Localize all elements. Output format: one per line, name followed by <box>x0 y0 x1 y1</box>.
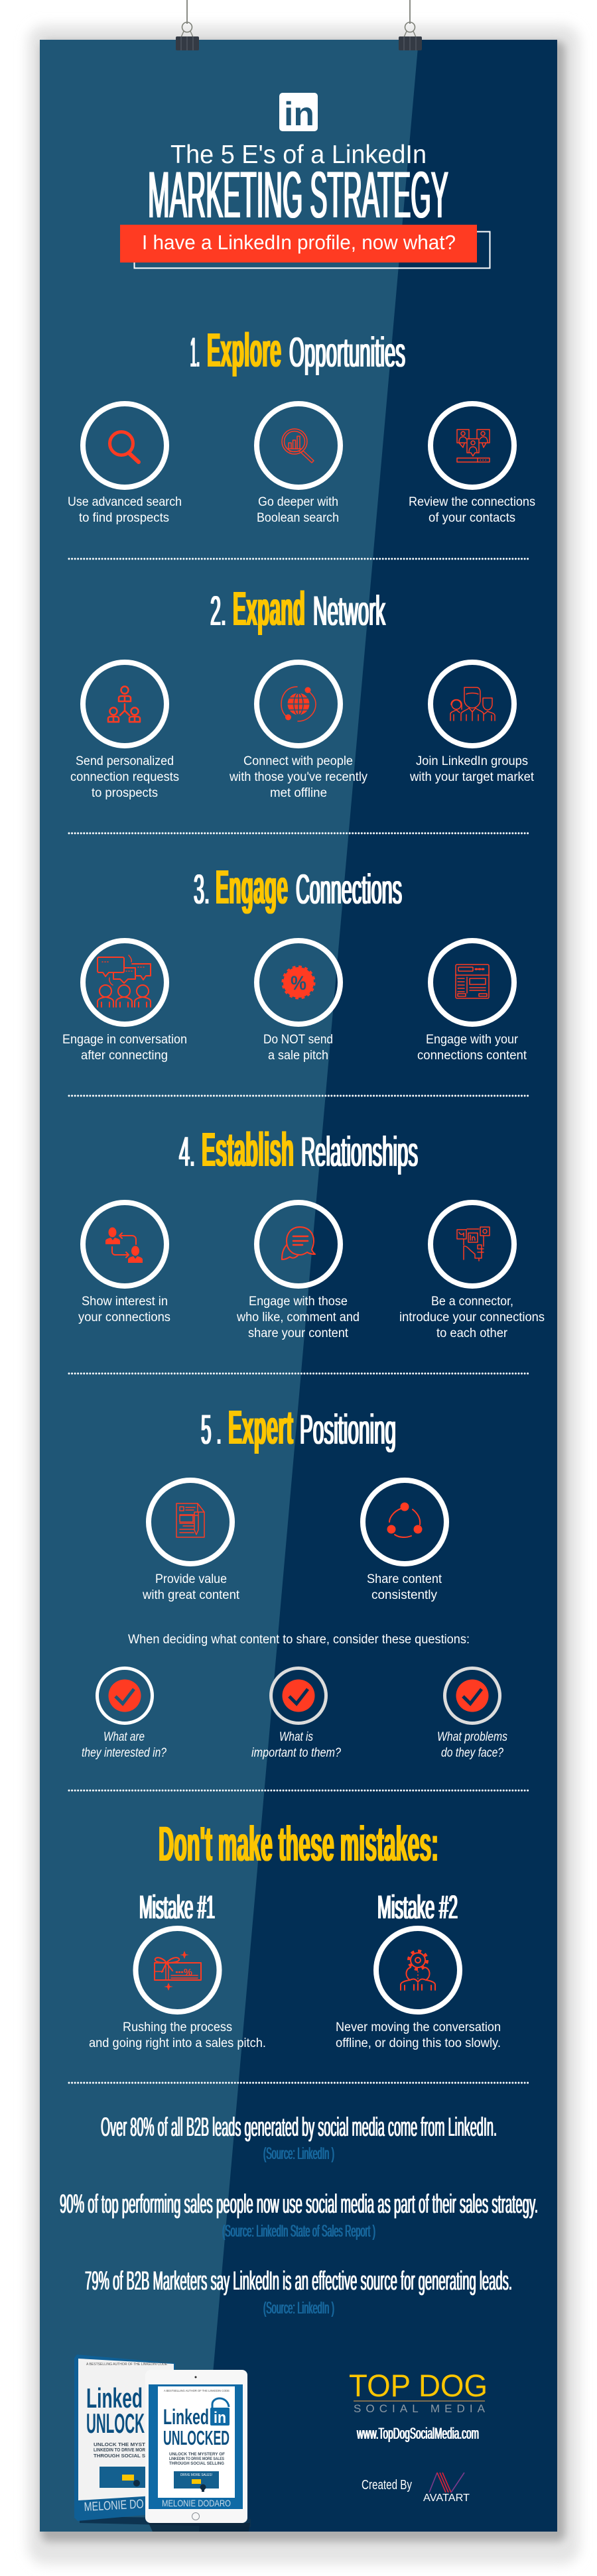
caption: after connecting <box>81 1049 168 1063</box>
question 2 <box>251 1668 341 1760</box>
caption: Go deeper with <box>258 495 338 509</box>
question 1 <box>82 1668 166 1760</box>
caption <box>142 1572 240 1602</box>
logo: Top Dog Social Media: TOP DOG <box>349 2368 488 2403</box>
caption: Be a connector, <box>431 1295 513 1309</box>
caption: Do NOT send <box>263 1033 333 1047</box>
caption: Show interest in <box>82 1295 168 1309</box>
caption: introduce your connections <box>399 1311 545 1324</box>
caption: your connections <box>78 1311 170 1324</box>
tablet: THROUGH SOCIAL SELLING <box>169 2462 224 2466</box>
caption: met offline <box>270 786 327 800</box>
item: engage in conversation <box>62 941 187 1063</box>
icon: gear over people <box>376 1928 460 2012</box>
credit: created by Avatart: Created By <box>362 2478 412 2492</box>
stat 3: (Source: LinkedIn ) <box>263 2299 334 2317</box>
icon: magnifying glass <box>83 404 166 487</box>
caption: Connect with people <box>243 754 353 768</box>
section 5: Expert Positioning: Positioning <box>300 1407 396 1453</box>
credit: created by Avatart <box>362 2473 470 2504</box>
logo: Top Dog Social Media: SOCIAL MEDIA <box>354 2402 486 2415</box>
section 3: Engage Connections: Connections <box>296 866 402 913</box>
section 1: Explore Opportunities <box>68 324 535 525</box>
caption: Review the connections <box>409 495 535 509</box>
book: Linked <box>86 2382 143 2414</box>
caption <box>263 1033 333 1063</box>
icon: gift voucher <box>135 1928 219 2012</box>
section 1: Explore Opportunities: Opportunities <box>289 329 405 376</box>
stat 2: (Source: LinkedIn State of Sales Report ) <box>222 2222 375 2241</box>
label: Mistake #2 <box>377 1889 458 1926</box>
stat 3 <box>85 2266 512 2317</box>
caption <box>409 495 535 525</box>
caption <box>409 754 535 784</box>
icon: network of people <box>83 662 166 746</box>
caption: with your target market <box>409 770 535 784</box>
caption <box>367 1572 442 1602</box>
icon: discount badge <box>257 941 340 1024</box>
caption <box>78 1295 170 1324</box>
section 5: Expert Positioning <box>82 1401 507 1760</box>
section 4: Establish Relationships <box>78 1124 545 1340</box>
caption: important to them? <box>251 1746 341 1760</box>
section 4: Establish Relationships: Relationships <box>301 1129 418 1175</box>
tablet: in <box>214 2409 226 2427</box>
caption <box>417 1033 527 1063</box>
caption <box>236 1295 360 1340</box>
tablet: Linked <box>163 2405 209 2429</box>
caption: of your contacts <box>429 511 515 525</box>
caption <box>251 1730 341 1760</box>
item: connect offline <box>229 662 367 800</box>
icon: two people with arrows <box>83 1202 166 1286</box>
caption <box>257 495 339 525</box>
item: review connections <box>409 404 535 525</box>
icon: check mark <box>271 1668 326 1724</box>
caption: with those you've recently <box>229 770 367 784</box>
caption: share your content <box>248 1326 349 1340</box>
website: www.TopDogSocialMedia.com <box>356 2425 479 2443</box>
heading: Expert <box>228 1401 293 1454</box>
caption <box>399 1295 545 1340</box>
caption: Engage with those <box>249 1295 348 1309</box>
book: UNLOCK THE MYST <box>94 2443 146 2447</box>
heading: Engage <box>216 861 288 914</box>
caption <box>82 1730 166 1760</box>
item: LinkedIn groups <box>409 662 535 784</box>
caption <box>70 754 179 800</box>
caption <box>68 495 182 525</box>
caption: and going right into a sales pitch. <box>89 2036 266 2050</box>
caption: who like, comment and <box>236 1311 360 1324</box>
mistake 1 <box>89 1889 266 2050</box>
section: mistakes <box>89 1816 501 2050</box>
mistake 1: Mistake #1 <box>139 1889 215 1926</box>
caption: What are <box>103 1730 145 1744</box>
section 2: Expand Network: Network <box>313 588 385 634</box>
heading: 2. <box>210 588 226 634</box>
caption: Rushing the process <box>123 2020 232 2034</box>
item: personalized requests <box>70 662 179 800</box>
stat 1 <box>101 2113 497 2163</box>
icon: contact cards <box>431 404 514 487</box>
item: boolean search <box>257 404 340 525</box>
tablet: UNLOCK THE MYSTERY OF <box>169 2453 225 2457</box>
caption: Share content <box>367 1572 442 1586</box>
caption: Engage in conversation <box>62 1033 187 1047</box>
icon: group of three <box>431 662 514 746</box>
heading: Expand <box>233 583 305 636</box>
heading: 3. <box>194 866 210 913</box>
caption <box>336 2020 501 2050</box>
heading: 4. <box>179 1129 195 1175</box>
caption: connections content <box>417 1049 527 1063</box>
credit: created by Avatart: AVATART <box>423 2492 470 2504</box>
caption: Join LinkedIn groups <box>416 754 528 768</box>
tablet: DRIVE MORE SALES! <box>180 2473 212 2477</box>
icon: document with pen <box>149 1480 232 1564</box>
icon: discount badge: % <box>291 972 306 994</box>
icon: check mark <box>97 1668 153 1724</box>
caption: to find prospects <box>79 511 169 525</box>
heading: 1. <box>190 329 200 376</box>
caption: Engage with your <box>426 1033 519 1047</box>
tablet: A BESTSELLING AUTHOR OF THE LINKEDIN CODE <box>164 2389 230 2392</box>
caption: Provide value <box>155 1572 227 1586</box>
tablet: UNLOCKED <box>163 2426 230 2449</box>
caption: Use advanced search <box>68 495 182 509</box>
stat 2 <box>60 2190 538 2241</box>
book: THROUGH SOCIAL S <box>94 2454 145 2459</box>
icon: magnifier with bars <box>257 404 340 487</box>
tablet: MELONIE DODARO <box>162 2498 231 2508</box>
heading: 5 . <box>201 1407 222 1453</box>
book: UNLOCK <box>86 2408 145 2439</box>
caption: What is <box>279 1730 313 1744</box>
book: LINKEDIN TO DRIVE MOR <box>94 2448 145 2453</box>
caption <box>89 2020 266 2050</box>
subtitle banner: I have a LinkedIn profile, now what? <box>142 231 456 254</box>
icon: share cycle <box>363 1480 446 1564</box>
caption: to prospects <box>92 786 158 800</box>
book: MELONIE DO <box>84 2497 144 2514</box>
section 3: Engage Connections <box>62 861 527 1063</box>
item: be a connector <box>399 1202 545 1340</box>
questions intro: When deciding what content to share, consider these questions: <box>128 1633 470 1647</box>
item: show interest <box>78 1202 170 1324</box>
icon: people talking <box>83 941 166 1024</box>
item: engage with likers <box>236 1202 360 1340</box>
icon: LinkedIn logo: in <box>284 95 314 133</box>
tablet <box>145 2370 250 2532</box>
mistake 2 <box>336 1889 501 2050</box>
icon: speech bubbles <box>257 1202 340 1286</box>
item: advanced search <box>68 404 182 525</box>
icon: check mark <box>444 1668 500 1724</box>
caption: offline, or doing this too slowly. <box>336 2036 501 2050</box>
caption: a sale pitch <box>268 1049 328 1063</box>
caption: Boolean search <box>257 511 339 525</box>
binder clip right <box>399 0 422 50</box>
item: share content <box>363 1480 446 1602</box>
stat 1: (Source: LinkedIn ) <box>263 2144 334 2163</box>
title line 1: The 5 E's of a LinkedIn <box>170 141 427 169</box>
item: no sale pitch <box>257 941 340 1063</box>
section 2: Expand Network <box>70 583 535 800</box>
item: engage with content <box>417 941 527 1063</box>
question 3 <box>437 1668 507 1760</box>
heading: Explore <box>207 324 281 377</box>
caption: they interested in? <box>82 1746 166 1760</box>
book: A BESTSELLING AUTHOR OF THE LINKEDIN CODE <box>86 2363 168 2367</box>
header <box>120 93 490 268</box>
caption: with great content <box>142 1588 240 1602</box>
caption: do they face? <box>441 1746 503 1760</box>
heading: Establish <box>202 1124 294 1177</box>
caption: What problems <box>437 1730 507 1744</box>
caption: to each other <box>436 1326 508 1340</box>
caption: Never moving the conversation <box>336 2020 501 2034</box>
item: provide value <box>142 1480 240 1602</box>
caption <box>229 754 367 800</box>
binder clip left <box>176 0 199 50</box>
icon: globe with orbit <box>257 662 340 746</box>
caption: consistently <box>371 1588 437 1602</box>
caption <box>62 1033 187 1063</box>
statistics <box>60 2113 538 2317</box>
tablet: LINKEDIN TO DRIVE MORE SALES <box>169 2457 224 2461</box>
icon: gift voucher: % <box>184 1967 192 1978</box>
caption <box>437 1730 507 1760</box>
icon: hand with social tiles <box>431 1202 514 1286</box>
caption: connection requests <box>70 770 179 784</box>
book and tablet mockup <box>74 2355 251 2532</box>
caption: Send personalized <box>76 754 174 768</box>
icon: web page <box>431 941 514 1024</box>
subtitle banner <box>120 225 490 268</box>
book <box>74 2355 251 2527</box>
